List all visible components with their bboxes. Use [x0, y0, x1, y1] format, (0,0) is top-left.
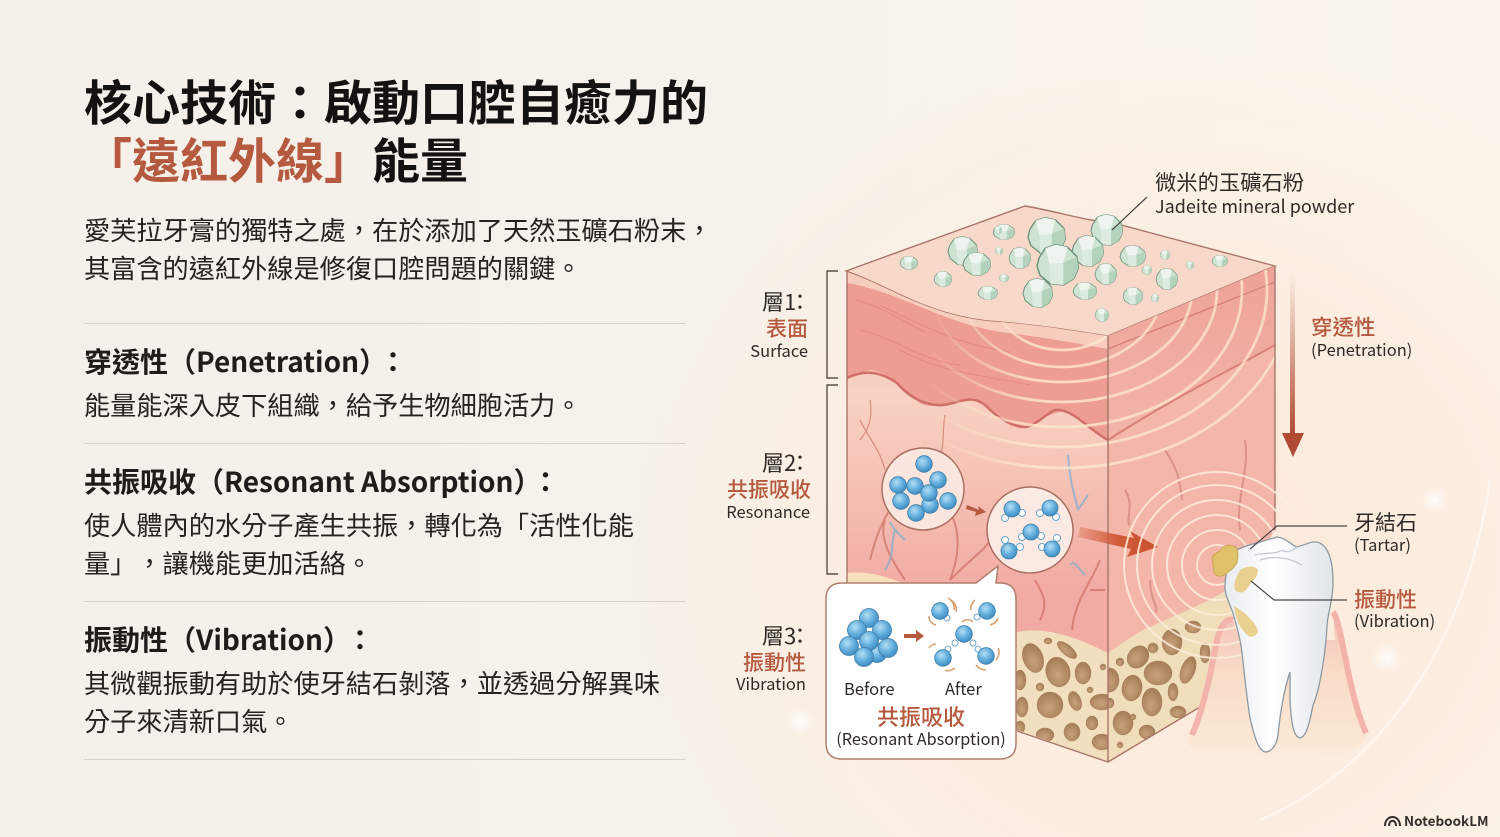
- heading: penetration: 穿透性（Penetration）：: [84, 341, 407, 381]
- title line 1: 核心技術：啟動口腔自癒力的: [84, 64, 708, 134]
- skin block illustration: [832, 112, 1292, 770]
- label: layer 2: ：: [789, 446, 811, 478]
- label: tartar: 牙結石: [1354, 507, 1417, 537]
- label: layer 3: Vibration: [736, 671, 806, 695]
- tartar deposits: [1212, 545, 1258, 637]
- energy arcs: [940, 318, 1108, 470]
- before cluster: [840, 608, 898, 666]
- label: layer 2: 共振吸收: [727, 474, 811, 504]
- heading: vibration: 振動性（Vibration）：: [84, 619, 374, 659]
- right face layers: [1108, 266, 1275, 760]
- body: vibration: 其微觀振動有助於使牙結石剝落，並透過分解異味: [84, 663, 660, 701]
- magnified cluster circle: [882, 448, 964, 530]
- before / after labels: After: [945, 676, 982, 700]
- body: resonant absorption: 量」，讓機能更加活絡。: [84, 543, 372, 581]
- label: penetration: [1311, 311, 1412, 361]
- layer brackets: [827, 271, 838, 574]
- title line 2: 「遠紅外線」能量: [84, 122, 468, 192]
- energy arrow toward tooth: [1078, 527, 1158, 557]
- label: layer 1: [750, 285, 811, 362]
- section: vibration: [84, 619, 660, 739]
- bone left face: [1016, 630, 1108, 760]
- diagram: skin block, tooth and labels: [728, 172, 1491, 826]
- intro text: 愛芙拉牙膏的獨特之處，在於添加了天然玉礦石粉末，: [84, 210, 712, 248]
- label: layer 1: 表面: [766, 313, 808, 343]
- callout subtitle: (Resonant Absorption): [836, 726, 1006, 750]
- label: vibration: 振動性: [1354, 584, 1417, 614]
- label: vibration: (Vibration): [1354, 608, 1435, 632]
- arrow between circles: [966, 505, 986, 516]
- callout: resonant absorption: [826, 566, 1016, 759]
- veins: [860, 400, 1105, 630]
- label: layer 2: [726, 446, 811, 523]
- label: layer 3: 振動性: [743, 647, 806, 677]
- body: vibration: [84, 663, 660, 739]
- panel: text column: [84, 64, 712, 760]
- label: tartar: [1354, 507, 1417, 556]
- left face layers: [848, 272, 1108, 761]
- before / after labels: Before: [844, 676, 895, 700]
- leader line: vibration: [1251, 581, 1347, 600]
- label: tartar: (Tartar): [1354, 532, 1411, 556]
- logo: NotebookLM: NotebookLM: [1404, 810, 1489, 830]
- label: layer 1: 層1: [762, 285, 796, 317]
- vibration rings: [1124, 472, 1310, 658]
- before / after labels: [844, 676, 982, 700]
- label: jadeite mineral powder: 微米的玉礦石粉: [1155, 166, 1304, 197]
- body: resonant absorption: 使人體內的水分子產生共振，轉化為「活性化能: [84, 505, 634, 543]
- decorative glows: [786, 480, 1490, 820]
- block edges: [847, 266, 1275, 762]
- tooth illustration: [1124, 472, 1367, 764]
- label: jadeite mineral powder: Jadeite mineral powder: [1155, 193, 1355, 219]
- label: layer 1: Surface: [750, 338, 808, 362]
- tooth body: [1225, 537, 1333, 752]
- body: vibration: 分子來清新口氣。: [84, 701, 294, 739]
- body: penetration: 能量能深入皮下組織，給予生物細胞活力。: [84, 385, 582, 423]
- section: penetration: [84, 341, 582, 423]
- gum and bone socket: [1187, 612, 1367, 764]
- heading: resonant absorption: 共振吸收（Resonant Absorption）：: [84, 461, 559, 501]
- intro text: 其富含的遠紅外線是修復口腔問題的關鍵。: [84, 248, 582, 286]
- label: layer 3: 層3: [762, 619, 796, 651]
- small arrow: [904, 630, 924, 642]
- after molecules: [929, 598, 999, 671]
- section: resonant absorption: [84, 461, 634, 581]
- label: layer 3: ：: [789, 619, 811, 651]
- label: layer 2: Resonance: [726, 499, 810, 523]
- block top surface: [846, 206, 1275, 336]
- jadeite crystals: [900, 214, 1228, 322]
- label: layer 1: ：: [789, 285, 811, 317]
- magnified separated molecules circle: [987, 487, 1073, 573]
- label: penetration: 穿透性: [1311, 311, 1376, 342]
- body: resonant absorption: [84, 505, 634, 581]
- label: layer 2: 層2: [762, 446, 796, 478]
- fat strip: [848, 572, 901, 582]
- label: penetration: (Penetration): [1311, 337, 1412, 361]
- leader line: tartar: [1250, 526, 1347, 549]
- label: jadeite mineral powder: [1112, 166, 1355, 230]
- intro text: [84, 210, 712, 286]
- arrow: penetration: [1282, 275, 1304, 457]
- callout title: 共振吸收: [877, 700, 965, 732]
- label: layer 3: [736, 619, 811, 695]
- label: vibration: [1354, 584, 1435, 632]
